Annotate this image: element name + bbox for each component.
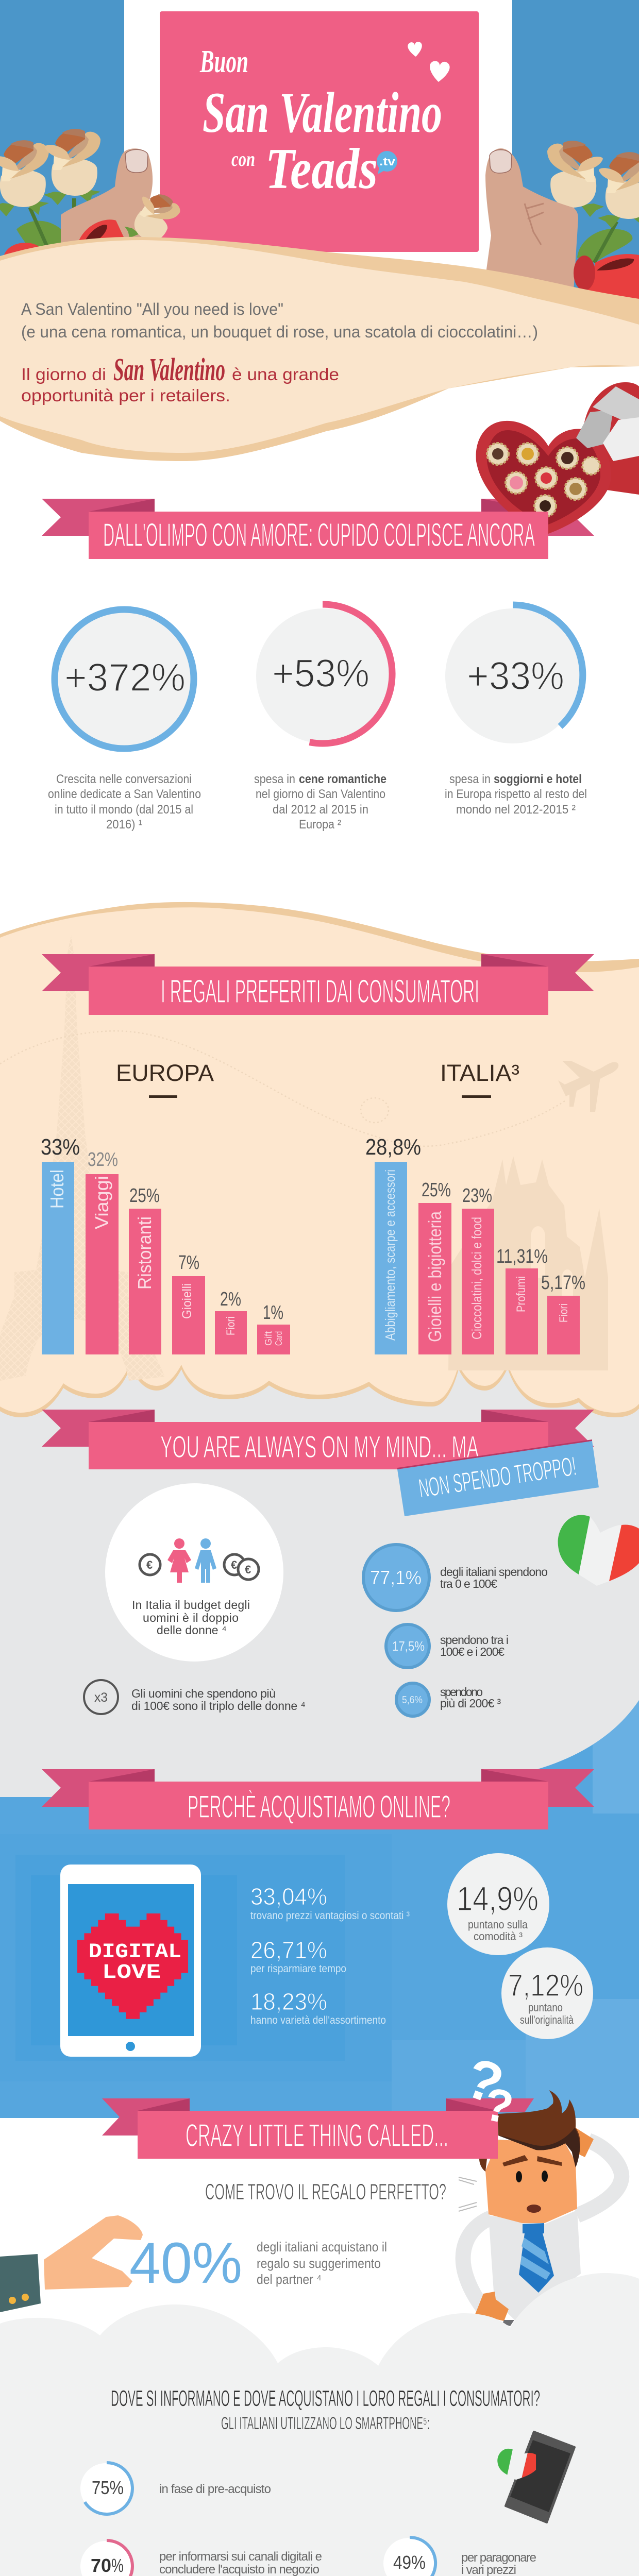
- callout: x3: Gli uomini che spendono più: [131, 1687, 276, 1700]
- bubble: 14,9%: [447, 1853, 549, 1955]
- stat description: [48, 772, 201, 832]
- bar chart: italia: 5,17%: [541, 1272, 585, 1294]
- left hand: [61, 148, 155, 247]
- icon: smartphone with flag heart: [497, 2432, 575, 2522]
- bar chart: europa: Gift: [263, 1331, 274, 1346]
- ring stat: 70%: %: [111, 2555, 124, 2576]
- blue background: perchè acquistiamo online: [0, 1695, 639, 2118]
- intro text: opportunità per i retailers.: [21, 386, 230, 405]
- panel: budget circle: [105, 1483, 283, 1662]
- heading: europa: EUROPA: [116, 1060, 214, 1086]
- heading: italia: [440, 1060, 519, 1098]
- bar chart: europa: Fiori: [224, 1316, 237, 1335]
- bar chart: europa: Gioielli: [180, 1283, 194, 1319]
- icon: coin: [140, 1554, 160, 1575]
- heading: europa: [116, 1060, 214, 1098]
- icon: milan cathedral: [448, 1156, 608, 1370]
- motion lines: [459, 2177, 477, 2211]
- bar chart: italia: [365, 1134, 585, 1354]
- icon: question marks: ?: [457, 2045, 511, 2117]
- ring stat: 75%: [80, 2463, 271, 2514]
- bar chart: italia: 23%: [462, 1185, 492, 1207]
- bar chart: europa: 32%: [88, 1149, 118, 1171]
- face: [485, 2140, 577, 2223]
- icon: eiffel tower: [0, 935, 165, 1381]
- stats: online reasons: 33,04%: [250, 1883, 327, 1910]
- icon: man: [195, 1538, 216, 1583]
- bar chart: europa: 1%: [263, 1302, 283, 1324]
- budget text: delle donne ⁴: [157, 1623, 227, 1637]
- stat: +372%: +372%: [64, 656, 186, 700]
- icon: tablet with digital love heart: DIGITAL: [89, 1941, 181, 1964]
- bar chart: italia: Cioccolatini, dolci e food: [469, 1217, 484, 1340]
- eyebrows: [502, 2155, 562, 2166]
- banner: perchè acquistiamo online: [42, 1769, 594, 1829]
- callout: x3: di 100€ sono il triplo delle donne ⁴: [131, 1699, 306, 1713]
- stat: 40%: del partner ⁴: [257, 2272, 322, 2287]
- dotted flight path: [0, 1031, 566, 1146]
- stats: online reasons: 26,71%: [250, 1937, 327, 1963]
- bubble: 7,12%: [501, 1947, 593, 2039]
- heading: dove si informano: GLI ITALIANI UTILIZZANO LO SMARTPHONE⁵:: [221, 2414, 430, 2433]
- bar chart: italia: Profumi: [514, 1276, 528, 1312]
- right hand: [485, 148, 578, 291]
- stat: 77,1%: tra 0 e 100€: [440, 1577, 497, 1590]
- bar chart: europa: Card: [274, 1331, 284, 1346]
- intro text: (e una cena romantica, un bouquet di rose, una scatola di cioccolatini…): [21, 323, 538, 341]
- icon: heart-shaped chocolate box: [476, 382, 639, 534]
- stat description: spesa in: [254, 772, 295, 786]
- panel: cream gifts section with scalloped edge: [0, 902, 639, 1417]
- stat: +33%: +33%: [467, 654, 564, 698]
- banner: crazy little thing called: [102, 2098, 534, 2159]
- stat description: in tutto il mondo (dal 2015 al: [55, 803, 193, 817]
- icon: coins: [224, 1554, 259, 1580]
- stat: 17,5%: [386, 1624, 509, 1668]
- banner: you are always on my mind: [42, 1410, 594, 1469]
- intro text: San Valentino: [113, 352, 225, 387]
- intro text: è una grande: [232, 365, 339, 384]
- bubble: 14,9%: comodità ³: [474, 1930, 523, 1943]
- stat description: [445, 772, 587, 817]
- stat: 17,5%: 100€ e i 200€: [440, 1645, 505, 1658]
- heading: italia: ITALIA³: [440, 1060, 519, 1086]
- intro text: [21, 300, 538, 405]
- stat description: 2016) ¹: [106, 818, 142, 832]
- stat description: [254, 772, 386, 832]
- stats: online reasons: hanno varietà dell'assortimento: [250, 2014, 386, 2026]
- bar chart: italia: 28,8%: [365, 1134, 421, 1160]
- bubble: 14,9%: puntano sulla: [468, 1918, 528, 1931]
- budget text: [132, 1598, 250, 1637]
- bar chart: italia: Abbigliamento, scarpe e accessori: [382, 1170, 398, 1341]
- shirt: [489, 2210, 581, 2322]
- icon: woman: [167, 1538, 191, 1583]
- mouth: [527, 2205, 541, 2213]
- stat description: dal 2012 al 2015 in: [273, 803, 368, 817]
- ring stat: 75%: in fase di pre-acquisto: [159, 2482, 271, 2496]
- stat description: in Europa rispetto al resto del: [445, 787, 587, 801]
- bar chart: italia: 25%: [422, 1179, 451, 1201]
- stat: +372%: [48, 609, 201, 832]
- ribbon: non spendo troppo: [397, 1439, 599, 1516]
- illustration: worried man: [459, 2090, 621, 2326]
- icon: hearts: [408, 41, 450, 83]
- hair: [479, 2090, 580, 2172]
- stat description: nel giorno di San Valentino: [256, 787, 385, 801]
- stats: online reasons: 18,23%: [250, 1988, 327, 2015]
- banner: dall'olimpo con amore: [89, 512, 548, 559]
- stat description: Europa ²: [299, 818, 341, 832]
- heading: dove si informano: [111, 2386, 540, 2433]
- bar chart: italia: Fiori: [557, 1303, 570, 1323]
- title: con: con: [231, 147, 255, 171]
- budget text: In Italia il budget degli: [132, 1598, 250, 1612]
- callout: x3: [84, 1680, 306, 1714]
- stat: 5,6%: spendono: [440, 1685, 483, 1699]
- dotted loop: [361, 1098, 389, 1123]
- stat: 40%: [129, 2231, 387, 2295]
- icon: coins: €: [231, 1558, 237, 1571]
- ring stat: 49% prices: per paragonare: [461, 2551, 536, 2565]
- stat description: cene romantiche: [299, 772, 386, 786]
- icon: tablet with digital love heart: [60, 1865, 201, 2057]
- bubble: 7,12%: sull'originalità: [520, 2013, 574, 2026]
- bar chart: europa: Hotel: [46, 1170, 68, 1209]
- callout: x3: x3: [94, 1690, 108, 1705]
- illustration: left roses and hand: [0, 129, 183, 263]
- bubble: 14,9%: 14,9%: [457, 1879, 539, 1918]
- stats: online reasons: per risparmiare tempo: [250, 1963, 346, 1975]
- bar chart: europa: [41, 1134, 290, 1354]
- tv bubble: .tv: [379, 155, 396, 168]
- gray background: you are always on my mind: [0, 1360, 639, 1797]
- pink title card: [160, 11, 479, 252]
- bar chart: europa: 33%: [41, 1134, 80, 1160]
- icon: tablet with digital love heart: LOVE: [102, 1961, 161, 1985]
- stat: +53%: [254, 604, 392, 832]
- ring stat: 70%: 70: [91, 2555, 111, 2576]
- stat: 5,6%: più di 200€ ³: [440, 1697, 501, 1710]
- stat description: soggiorni e hotel: [494, 772, 582, 786]
- bar chart: europa: Ristoranti: [134, 1216, 155, 1290]
- stats: online reasons: trovano prezzi vantagiosi o scontati ³: [250, 1910, 410, 1922]
- icon: plane: [558, 1061, 618, 1112]
- stat: 77,1%: 77,1%: [370, 1567, 422, 1589]
- heading: come trovo il regalo perfetto: COME TROVO IL REGALO PERFETTO?: [205, 2179, 446, 2205]
- stat: 17,5%: spendono tra i: [440, 1633, 509, 1647]
- banner tails: cupido: [42, 499, 594, 536]
- wave: cream intro band: [0, 237, 639, 461]
- stat description: online dedicate a San Valentino: [48, 787, 201, 801]
- stat: 5,6%: [396, 1683, 501, 1716]
- stats: online reasons: [250, 1883, 410, 2026]
- illustration: right roses and hand: [485, 141, 639, 309]
- hand at waist: [475, 2292, 514, 2326]
- header: blue panels, card and title: [0, 0, 639, 319]
- panel: gray cloud section: [0, 2273, 639, 2576]
- bubble: 7,12%: puntano: [528, 2001, 563, 2014]
- icon: coin: €: [146, 1558, 153, 1571]
- title: Buon: Buon: [199, 44, 248, 79]
- stat: 17,5%: 17,5%: [392, 1638, 425, 1654]
- ring stat: 75%: 75%: [92, 2477, 124, 2498]
- hand behind head: [576, 2128, 594, 2157]
- bar chart: europa: 7%: [178, 1252, 199, 1274]
- tv bubble: [377, 151, 397, 174]
- stat: 40%: degli italiani acquistano il: [257, 2239, 387, 2255]
- tie: [519, 2223, 554, 2293]
- bar chart: europa: 2%: [220, 1289, 241, 1310]
- bar chart: europa: Viaggi: [91, 1176, 112, 1229]
- ring stat: 49% prices: 49%: [393, 2552, 426, 2573]
- icon: question marks: ?: [479, 2078, 518, 2134]
- ring stat: 70%: [80, 2540, 322, 2576]
- banner: i regali preferiti: [42, 954, 594, 1015]
- icon: coins: €: [245, 1563, 251, 1576]
- bar chart: europa: 25%: [129, 1185, 160, 1207]
- icon: italian flag heart: [558, 1515, 639, 1586]
- title: San Valentino: San Valentino: [203, 81, 442, 145]
- arms: [463, 2141, 621, 2313]
- stat: 77,1%: [363, 1545, 548, 1611]
- stat: +33%: [445, 605, 587, 817]
- stat description: mondo nel 2012-2015 ²: [456, 803, 576, 817]
- intro text: Il giorno di: [21, 365, 106, 384]
- ring stat: 70%: per informarsi sui canali digitali e: [159, 2550, 322, 2564]
- intro text: A San Valentino "All you need is love": [21, 300, 283, 318]
- eyes: [516, 2171, 548, 2182]
- budget text: uomini è il doppio: [143, 1611, 239, 1624]
- stat: 5,6%: 5,6%: [402, 1694, 423, 1706]
- stat description: spesa in: [449, 772, 491, 786]
- stat: +53%: +53%: [272, 652, 369, 696]
- bar chart: italia: 11,31%: [496, 1246, 548, 1267]
- bar chart: italia: Gioielli e bigiotteria: [425, 1211, 445, 1342]
- stat: 77,1%: degli italiani spendono: [440, 1565, 548, 1579]
- stat: 40%: 40%: [129, 2231, 242, 2295]
- ring stat: 49% prices: [383, 2537, 536, 2576]
- stat description: Crescita nelle conversazioni: [56, 772, 192, 786]
- title: Teads: Teads: [265, 137, 378, 201]
- stat: 40%: regalo su suggerimento: [257, 2256, 381, 2271]
- icon: hand with sleeve: [0, 2215, 143, 2312]
- bubble: 7,12%: 7,12%: [508, 1968, 583, 2003]
